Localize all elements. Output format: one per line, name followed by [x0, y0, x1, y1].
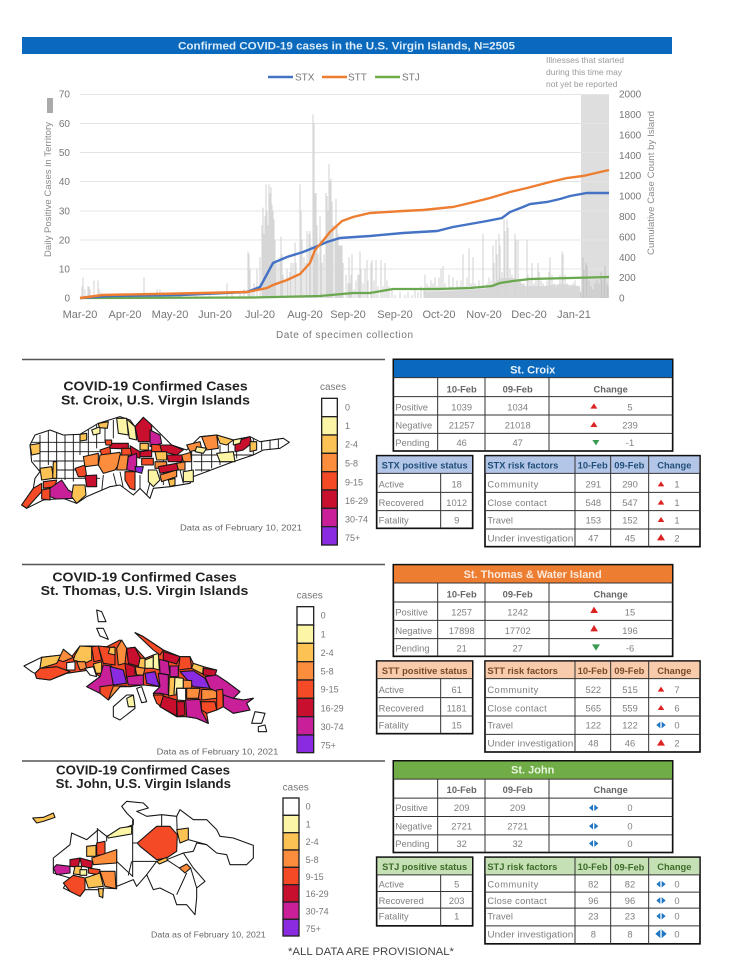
table: STX risk factors: 152	[622, 515, 638, 525]
table: STX risk factors: 45	[625, 533, 635, 543]
table: STT risk factors: 7	[674, 685, 680, 695]
left axis labels	[59, 90, 70, 304]
table: STJ risk factors: 96	[588, 896, 599, 906]
table: St. John test results: 09-Feb	[503, 785, 533, 795]
map title: COVID-19 Confirmed Cases	[56, 764, 230, 778]
table: STX risk factors: 1	[674, 515, 680, 525]
map title: St. John, U.S. Virgin Islands	[56, 777, 231, 791]
table: St. Croix test results: 09-Feb	[503, 384, 533, 394]
month axis labels: Dec-20	[511, 309, 547, 321]
table: STJ risk factors: 8	[627, 929, 633, 939]
map legend: 30-74	[321, 722, 344, 732]
table: STT risk factors: Community	[487, 685, 539, 695]
title banner: Confirmed COVID-19 cases in the U.S. Virgin Islands, N=2505	[178, 40, 515, 52]
map legend: 16-29	[345, 496, 368, 506]
table: STT risk factors: 522	[586, 685, 601, 695]
month axis labels: Nov-20	[466, 309, 502, 321]
table: St. Croix test results: 21257	[449, 421, 475, 431]
choropleth: St. Croix	[22, 417, 289, 508]
table: St. Thomas test results: 1242	[507, 608, 528, 618]
table: STJ risk factors: 82	[625, 879, 635, 889]
section divider rules	[22, 360, 385, 761]
table: STT risk factors: 122	[586, 721, 601, 731]
table: St. Thomas test results: 1257	[451, 608, 472, 618]
map legend: 16-29	[321, 703, 344, 713]
choropleth: St. Thomas	[24, 610, 267, 732]
table: STX positive status: 18	[451, 480, 462, 490]
map legend: 30-74	[306, 907, 329, 917]
table: STT risk factors	[485, 661, 700, 752]
month axis labels: Jul-20	[245, 309, 275, 321]
map legend: 5-8	[321, 667, 334, 677]
map legend: 1	[321, 629, 326, 639]
table: STX risk factors: 548	[586, 498, 601, 508]
table: STJ positive status: Fatality	[379, 911, 409, 921]
table: St. John test results: 2721	[451, 821, 472, 831]
map legend: 0	[321, 611, 326, 621]
table: STJ risk factors: Change	[657, 862, 691, 872]
left axis labels: 40	[59, 177, 70, 188]
table: STJ risk factors: 0	[674, 911, 680, 921]
right axis labels: 1400	[619, 151, 642, 162]
left axis labels: 60	[59, 119, 70, 130]
table: STT risk factors: 515	[622, 685, 638, 695]
left axis labels: 0	[64, 294, 70, 304]
chart legend: STJ	[402, 72, 420, 84]
month axis labels: Apr-20	[108, 309, 142, 321]
table: STJ risk factors: 0	[674, 879, 680, 889]
table: STJ risk factors: 0	[674, 929, 680, 939]
table: STT risk factors: Under investigation	[487, 739, 573, 749]
note: reporting delay: during this time may	[546, 67, 623, 77]
table: St. Thomas test results: Change	[594, 590, 628, 600]
table: STJ risk factors: Travel	[487, 911, 513, 921]
map legend: 9-15	[345, 477, 363, 487]
map legend: 16-29	[306, 889, 329, 899]
map legend: 2-4	[345, 440, 358, 450]
map legend: cases	[320, 382, 346, 393]
map title: COVID-19 Confirmed Cases	[52, 570, 237, 584]
left axis labels: 20	[59, 236, 70, 246]
map legend	[283, 783, 329, 936]
map title: COVID-19 Confirmed Cases	[63, 380, 248, 394]
month axis labels: Sep-20	[330, 309, 366, 321]
left axis title: Daily Positive Cases in Territory	[43, 122, 54, 257]
table: STT risk factors: Change	[657, 666, 691, 676]
table: St. John test results: 32	[512, 839, 523, 849]
table: STX risk factors: 47	[588, 533, 599, 543]
STT cumulative line	[80, 170, 609, 298]
note: reporting delay	[546, 55, 624, 89]
table: STX risk factors: Under investigation	[487, 533, 573, 543]
month axis labels: Aug-20	[287, 309, 323, 321]
panel: St. John tables	[377, 761, 700, 944]
table: STX risk factors: 1	[674, 498, 680, 508]
table: St. John test results: 10-Feb	[447, 785, 477, 795]
low daily case baseline area	[425, 278, 581, 298]
table: STJ risk factors: Close contact	[487, 896, 547, 906]
map legend: 75+	[321, 741, 336, 751]
right axis labels	[619, 90, 642, 304]
left axis labels: 70	[59, 90, 70, 100]
table: STT positive status: Active	[379, 685, 404, 695]
table: STT risk factors: Travel	[487, 721, 513, 731]
map legend: 75+	[345, 533, 360, 543]
table: STT risk factors: 0	[674, 721, 680, 731]
table: STX risk factors: 547	[622, 498, 638, 508]
table: St. Thomas test results: 15	[625, 608, 635, 618]
map title: St. Thomas, U.S. Virgin Islands	[41, 584, 248, 598]
table: St. Croix test results: 1039	[451, 402, 472, 412]
map legend: 9-15	[321, 685, 339, 695]
right axis labels: 800	[619, 212, 636, 223]
table: St. Croix test results: 1034	[507, 402, 528, 412]
table: St. John test results: 209	[510, 803, 525, 813]
right axis labels: 2000	[619, 90, 642, 100]
table: St. Croix test results: 47	[512, 438, 523, 448]
table: STX positive status: Fatality	[379, 515, 409, 525]
month axis labels	[63, 309, 591, 321]
table: St. Thomas test results: Positive	[395, 608, 428, 618]
shaded recent period	[581, 94, 609, 298]
right axis labels: 1000	[619, 192, 642, 202]
table: STT positive status: 15	[451, 721, 462, 731]
table: St. Thomas test results: 17702	[505, 626, 531, 636]
table: STJ risk factors: 82	[588, 879, 599, 889]
map legend: 5-8	[306, 855, 319, 865]
month axis labels: Oct-20	[422, 309, 456, 321]
table: STJ risk factors: 09-Feb	[614, 862, 645, 872]
table: St. Thomas test results: 10-Feb	[447, 590, 477, 600]
table: St. Croix test results: Negative	[395, 421, 432, 431]
table: STJ positive status: STJ positive status	[382, 862, 467, 872]
table: St. Croix test results: 5	[627, 402, 633, 412]
month axis labels: Jun-20	[198, 309, 232, 321]
date note: Data as of February 10, 2021	[151, 929, 266, 939]
table: STJ risk factors: Community	[487, 879, 539, 889]
month axis labels: May-20	[152, 309, 188, 321]
map legend: 1	[306, 820, 311, 830]
table: STT positive status: 61	[451, 685, 462, 695]
table: STJ risk factors: 23	[625, 911, 635, 921]
table: STX risk factors: 291	[586, 480, 601, 490]
table: STJ positive status: 5	[454, 879, 459, 889]
table: St. Croix test results: Change	[594, 384, 628, 394]
right axis labels: 0	[619, 294, 625, 304]
table: STX risk factors: Travel	[487, 515, 513, 525]
map legend	[320, 382, 368, 545]
map legend: cases	[283, 783, 309, 794]
table: STT risk factors: 565	[586, 703, 601, 713]
map legend: 0	[345, 403, 350, 413]
table: STX risk factors: 290	[622, 480, 638, 490]
map title	[56, 764, 231, 791]
month axis labels: Jan-21	[557, 309, 591, 321]
table: STT risk factors: 48	[588, 739, 599, 749]
table: St. Thomas test results: 17898	[449, 626, 475, 636]
left axis labels: 10	[59, 264, 70, 276]
table: St. Thomas test results	[393, 565, 673, 656]
date note: Data as of February 10, 2021	[157, 747, 279, 757]
table: STT risk factors: 10-Feb	[578, 666, 608, 676]
map legend: cases	[297, 590, 323, 601]
month axis labels: Sep-20	[377, 309, 413, 321]
table: St. John test results: St. John	[511, 764, 555, 776]
note: reporting delay: not yet be reported	[546, 79, 618, 89]
table: STX risk factors: 153	[586, 515, 601, 525]
table: St. John test results: 32	[456, 839, 467, 849]
table: STX positive status: 1012	[446, 498, 467, 508]
table: St. Thomas test results: -6	[626, 643, 634, 653]
table: STX positive status: Recovered	[379, 498, 424, 508]
table: STT positive status: STT positive status	[382, 666, 467, 676]
table: STT risk factors: 122	[622, 721, 638, 731]
table: STJ positive status: Recovered	[379, 896, 424, 906]
map legend: 1	[345, 421, 350, 431]
table: St. Croix test results	[393, 359, 673, 451]
table: STX risk factors	[485, 456, 700, 547]
table: St. Croix test results: 46	[456, 438, 467, 448]
table: St. John test results: Change	[594, 785, 628, 795]
table: STX risk factors: Community	[487, 480, 539, 490]
table: St. John test results: 0	[627, 839, 633, 849]
table: STX risk factors: STX risk factors	[487, 461, 558, 471]
table: STX positive status: STX positive status	[382, 461, 468, 471]
note: reporting delay: Illnesses that started	[546, 55, 624, 65]
chart legend: STT	[348, 72, 367, 84]
table: STJ risk factors: STJ risk factors	[487, 862, 557, 872]
table: St. Thomas test results: Negative	[395, 626, 432, 636]
table: St. John test results: 0	[627, 821, 633, 831]
map legend: 2-4	[306, 837, 319, 847]
map legend: 9-15	[306, 872, 324, 882]
right axis title: Cumulative Case Count by Island	[646, 111, 657, 255]
right axis labels: 1200	[619, 171, 642, 182]
table: STJ risk factors: 23	[588, 911, 599, 921]
table: STT positive status: 1181	[447, 703, 467, 713]
table: St. Croix test results: Positive	[395, 402, 428, 412]
daily case bars	[82, 114, 608, 298]
table: STX risk factors: 1	[674, 480, 680, 490]
table: St. Croix test results: 239	[622, 421, 638, 431]
table: STJ risk factors: 8	[591, 929, 596, 939]
table: STT positive status: Recovered	[379, 703, 424, 713]
table: St. John test results: Pending	[395, 839, 430, 849]
table: STX positive status	[377, 456, 473, 528]
table: St. John test results: Positive	[395, 803, 428, 813]
table: STX risk factors: 2	[674, 533, 680, 543]
table: STT risk factors: Close contact	[487, 703, 547, 713]
right axis labels: 1600	[619, 130, 642, 142]
map title: St. Croix, U.S. Virgin Islands	[61, 394, 250, 408]
table: STX positive status: Active	[379, 480, 404, 490]
table: St. Thomas test results: 21	[456, 643, 467, 653]
table: STJ positive status: 1	[454, 911, 459, 921]
map legend: 30-74	[345, 515, 368, 525]
map legend: 2-4	[321, 648, 334, 658]
x axis title: Date of specimen collection	[276, 330, 413, 341]
table: STT risk factors: 2	[674, 739, 680, 749]
STX cumulative line	[80, 193, 609, 298]
table: St. Thomas test results: 196	[622, 626, 638, 636]
map legend: 5-8	[345, 458, 358, 468]
month axis labels: Mar-20	[63, 309, 97, 321]
map legend	[297, 590, 344, 753]
right axis labels: 200	[619, 273, 636, 284]
map legend: 0	[306, 802, 311, 812]
table: STT risk factors: 6	[674, 703, 680, 713]
STJ cumulative line	[80, 277, 609, 298]
table: STJ risk factors	[485, 857, 700, 944]
combo chart: daily and cumulative cases	[43, 55, 657, 341]
table: STJ risk factors: 10-Feb	[578, 862, 608, 872]
left axis labels: 50	[59, 148, 70, 159]
table: St. Croix test results: Pending	[395, 438, 430, 448]
map title	[61, 380, 250, 408]
table: STJ risk factors: 96	[625, 896, 635, 906]
date note: Data as of February 10, 2021	[180, 523, 302, 533]
panel: St. Thomas map	[24, 570, 344, 757]
panel: St. Croix tables	[377, 359, 700, 547]
footnote: *ALL DATA ARE PROVISIONAL*	[288, 946, 455, 958]
right axis labels: 1800	[619, 110, 642, 121]
table: St. Thomas test results: 27	[512, 643, 523, 653]
choropleth: St. John	[33, 801, 253, 915]
table: STT positive status	[377, 661, 473, 734]
table: St. Thomas test results: Pending	[395, 643, 430, 653]
table: St. Croix test results: -1	[626, 438, 634, 448]
table: STX risk factors: Close contact	[487, 498, 547, 508]
table: STT risk factors: 559	[622, 703, 638, 713]
table: St. John test results: 2721	[507, 821, 528, 831]
table: STX risk factors: Change	[657, 461, 691, 471]
panel: St. Thomas tables	[377, 565, 700, 752]
table: STJ risk factors: 0	[674, 896, 680, 906]
table: STT risk factors: STT risk factors	[487, 666, 558, 676]
table: STJ positive status: Active	[379, 879, 404, 889]
table: STX risk factors: 10-Feb	[578, 461, 608, 471]
left axis labels: 30	[59, 206, 70, 218]
chart legend	[268, 72, 420, 84]
map legend: 75+	[306, 924, 321, 934]
table: STX positive status: 9	[454, 515, 459, 525]
panel: St. John map	[33, 764, 329, 939]
table: St. Croix test results: 10-Feb	[447, 384, 477, 394]
title banner	[22, 37, 672, 54]
table: St. Croix test results: St. Croix	[510, 365, 556, 377]
table: St. Croix test results: 21018	[505, 421, 531, 431]
table: STT positive status: Fatality	[379, 721, 409, 731]
table: St. Thomas test results: 09-Feb	[503, 590, 533, 600]
panel: St. Croix map	[22, 380, 368, 545]
table: STX risk factors: 09-Feb	[614, 461, 645, 471]
table: STT risk factors: 09-Feb	[614, 666, 645, 676]
table: St. John test results: 209	[454, 803, 469, 813]
table: STT risk factors: 46	[625, 739, 635, 749]
table: St. Thomas test results: St. Thomas & Water Island	[464, 569, 602, 581]
map title	[41, 570, 248, 598]
table: STJ positive status	[377, 857, 473, 926]
table: St. John test results	[393, 761, 673, 852]
chart legend: STX	[295, 72, 315, 84]
right axis labels: 400	[619, 253, 636, 264]
table: STJ risk factors: Under investigation	[487, 929, 573, 939]
table: St. John test results: 0	[627, 803, 633, 813]
right axis labels: 600	[619, 232, 636, 244]
table: St. John test results: Negative	[395, 821, 432, 831]
table: STJ positive status: 203	[449, 896, 464, 906]
